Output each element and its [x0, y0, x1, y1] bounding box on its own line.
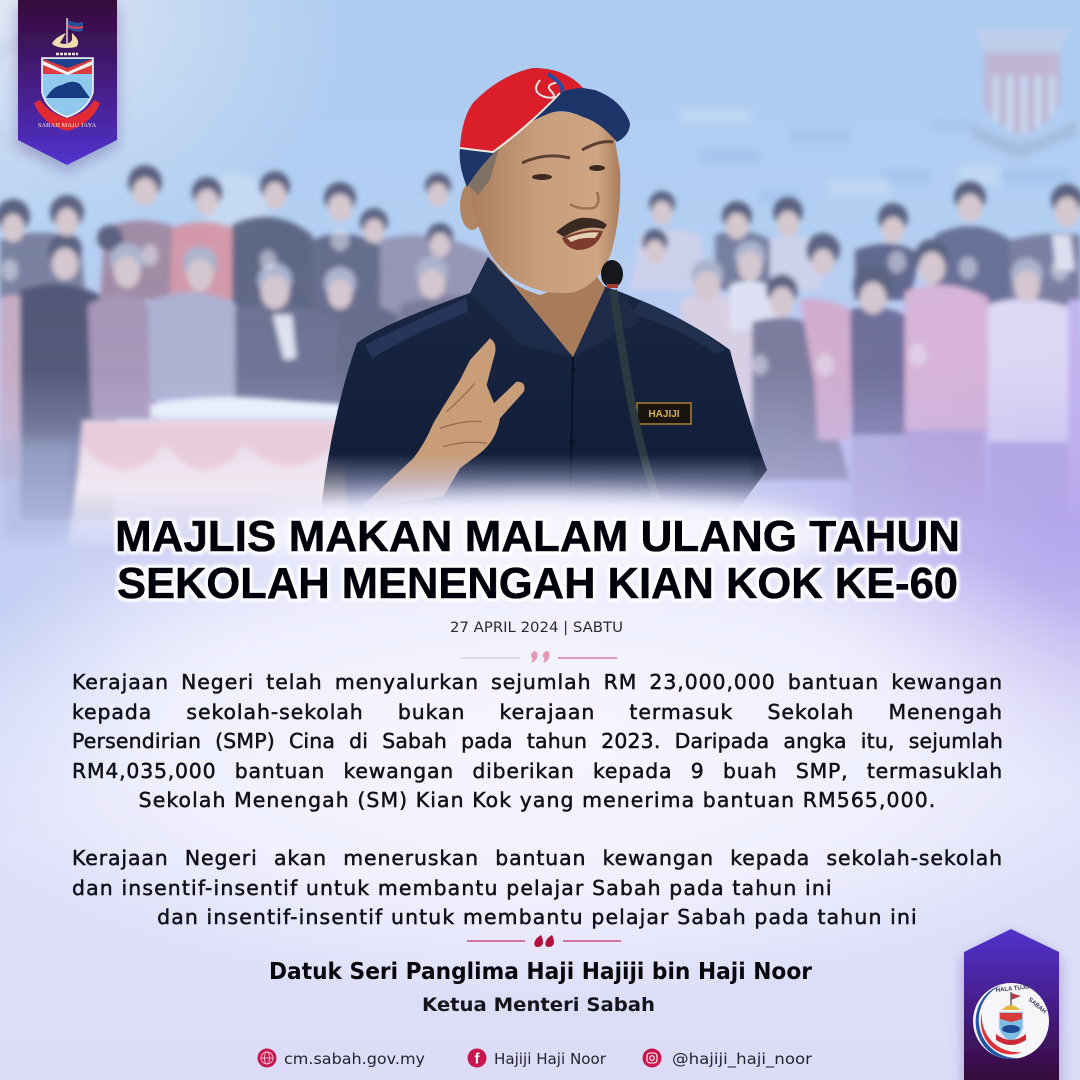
body paragraph one: [72, 670, 1003, 812]
speaker name: Datuk Seri Panglima Haji Hajiji bin Haji Noor: [269, 959, 813, 985]
title: SEKOLAH MENENGAH KIAN KOK KE-60: [117, 559, 958, 608]
name badge: HAJIJI: [648, 409, 680, 420]
microphone: [601, 260, 657, 500]
title: MAJLIS MAKAN MALAM ULANG TAHUN: [115, 512, 960, 561]
ear: [460, 185, 478, 230]
scroll with motto: [34, 100, 100, 131]
body paragraph one: Sekolah Menengah (SM) Kian Kok yang menerima bantuan RM565,000.: [139, 788, 936, 812]
body paragraph one: Persendirian (SMP) Cina di Sabah pada tahun 2023. Daripada angka itu, sejumlah: [72, 729, 1003, 753]
ribbon with Sabah crest, top left: [18, 0, 117, 165]
cap: [460, 68, 630, 187]
date: 27 APRIL 2024 | SABTU: [450, 620, 623, 636]
body paragraph one: Kerajaan Negeri telah menyalurkan sejumlah RM 23,000,000 bantuan kewangan: [72, 670, 1003, 694]
footer: instagram: @hajiji_haji_noor: [672, 1050, 813, 1069]
fade under portrait: [240, 495, 840, 575]
shield: [42, 58, 93, 117]
background photo: crowd of guests: [0, 165, 1080, 530]
body paragraph two: dan insentif-insentif untuk membantu pelajar Sabah pada tahun ini: [157, 905, 918, 929]
shirt: [320, 257, 767, 520]
footer: facebook: Hajiji Haji Noor: [494, 1050, 607, 1068]
scroll with motto: SABAH MAJU JAYA: [38, 122, 96, 129]
body paragraph two: [72, 846, 1003, 929]
guest bodies: [0, 217, 1080, 530]
face: [468, 111, 620, 293]
facial features: hair, eyebrows, eyes, nose, moustache, mouth: [468, 142, 613, 250]
neck: [490, 257, 605, 357]
round emblem: [973, 983, 1049, 1059]
guest heads: [0, 165, 1080, 317]
footer: website: cm.sabah.gov.my: [284, 1050, 425, 1068]
body paragraph one: kepada sekolah-sekolah bukan kerajaan termasuk Sekolah Menengah: [72, 700, 1003, 724]
name badge: [637, 403, 691, 424]
speaker portrait: [320, 68, 767, 520]
bottom quote divider: [467, 935, 621, 947]
watermark: school crest, top right: [968, 29, 1076, 158]
trophies: [2, 229, 1069, 377]
ribbon with Hala Tuju emblem, bottom right: [964, 929, 1059, 1080]
background photo: lower left guest legs: [0, 440, 80, 540]
speaker role: Ketua Menteri Sabah: [422, 994, 655, 1016]
round emblem: HALA TUJU: [996, 984, 1030, 994]
body paragraph two: dan insentif-insentif untuk membantu pelajar Sabah pada tahun ini: [72, 876, 833, 900]
background watermark: faint stage emblems and building: [0, 37, 1070, 237]
footer: instagram: [642, 1048, 813, 1069]
background photo: cake and draped table: [68, 397, 350, 545]
flag and hands: [52, 18, 83, 54]
round emblem: SABAH: [1027, 997, 1047, 1015]
raised hand: [360, 338, 525, 508]
top quote divider: [461, 651, 617, 663]
body paragraph one: RM4,035,000 bantuan kewangan diberikan kepada 9 buah SMP, termasuklah: [72, 759, 1003, 783]
title: [115, 512, 960, 608]
footer: facebook: f: [474, 1050, 480, 1068]
body paragraph two: Kerajaan Negeri akan meneruskan bantuan kewangan kepada sekolah-sekolah: [72, 846, 1003, 870]
